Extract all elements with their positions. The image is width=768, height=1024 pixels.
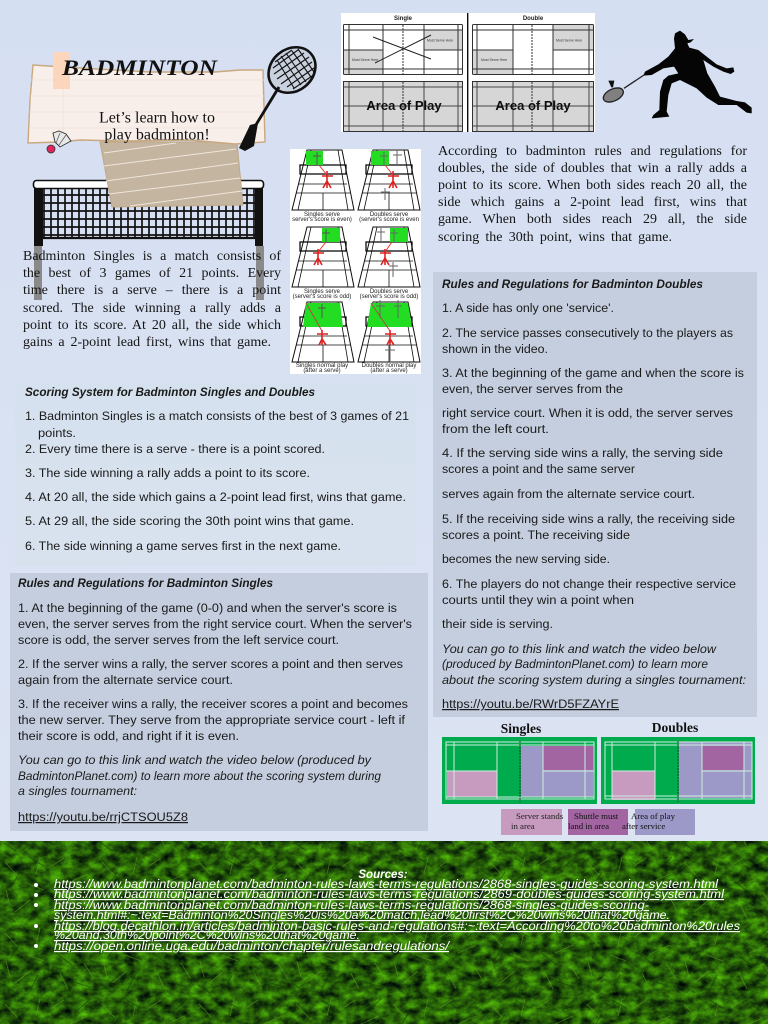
source links: %20and,30th%20point%2C%20wins%20that%20game. bbox=[54, 930, 360, 942]
icon: shuttlecock bbox=[47, 131, 71, 153]
singles list: again from the alternate service court. bbox=[18, 673, 233, 687]
doubles court bbox=[601, 737, 755, 804]
source links: https://www.badmintonplanet.com/badminton-rules-laws-terms-regulations/2868-singles-guides-scoring- bbox=[54, 900, 649, 912]
doubles list: right service court. When it is odd, the server serves bbox=[442, 406, 733, 420]
text: singles intro paragraph bbox=[23, 249, 282, 350]
singles list: their score is odd, and right if it is even. bbox=[18, 729, 239, 743]
singles video note: BadmintonPlanet.com) to learn more about the scoring system during bbox=[18, 769, 381, 783]
singles list: 2. If the server wins a rally, the server scores a point and then serves bbox=[18, 657, 403, 671]
doubles link: https://youtu.be/RWrD5FZAYrE bbox=[442, 697, 619, 711]
singles list bbox=[18, 601, 412, 743]
double serve court: Must Serve Here bbox=[556, 38, 582, 42]
court: singles serve even: Singles serve bbox=[304, 212, 341, 218]
singles heading: Rules and Regulations for Badminton Singles bbox=[18, 576, 273, 590]
singles video note bbox=[18, 753, 381, 798]
doubles list: becomes the new serving side. bbox=[442, 552, 610, 566]
single area of play: Area of Play bbox=[366, 98, 442, 113]
source links bbox=[54, 879, 740, 953]
text: singles intro paragraph: gains a 2-point lead first, wins that game. bbox=[23, 335, 271, 350]
scoring list: 1. Badminton Singles is a match consists of the best of 3 games of 21 bbox=[25, 409, 409, 423]
service court diagrams bbox=[442, 720, 755, 835]
court: doubles normal play bbox=[358, 300, 420, 374]
title note paper bbox=[28, 52, 265, 144]
court: doubles serve even: Doubles serve bbox=[370, 212, 409, 218]
doubles list: even, the server serves from the bbox=[442, 382, 623, 396]
heading: BADMINTON bbox=[61, 55, 218, 80]
panel: singles rules bbox=[10, 573, 428, 831]
doubles list: 6. The players do not change their respective service bbox=[442, 577, 736, 591]
bullets bbox=[34, 883, 38, 948]
doubles list: 4. If the serving side wins a rally, the serving side bbox=[442, 446, 723, 460]
doubles list: shown in the video. bbox=[442, 342, 548, 356]
doubles list: scores a point. The receiving side bbox=[442, 528, 630, 542]
panel: doubles rules bbox=[433, 272, 757, 717]
doubles list: 1. A side has only one 'service'. bbox=[442, 301, 614, 315]
doubles video note bbox=[442, 642, 746, 687]
scoring list: points. bbox=[38, 426, 76, 440]
scoring heading: Scoring System for Badminton Singles and Doubles bbox=[25, 385, 315, 399]
source links: https://www.badmintonplanet.com/badminton-rules-laws-terms-regulations/2869-doubles-guides-scoring-system.html bbox=[54, 889, 724, 901]
court: singles serve odd: Singles serve bbox=[304, 289, 341, 295]
legend: area of play after service: after service bbox=[622, 821, 665, 831]
panel: scoring system bbox=[15, 383, 416, 566]
court: doubles normal play: (after a serve) bbox=[370, 368, 408, 374]
text: doubles intro paragraph: According to badminton rules and regulations for bbox=[438, 144, 747, 159]
double serve court bbox=[472, 24, 594, 74]
doubles list: courts until they win a point when bbox=[442, 593, 634, 607]
sources bbox=[34, 869, 740, 953]
text: singles intro paragraph: the best of 3 games of 21 points. Every bbox=[23, 266, 281, 281]
court: singles serve even: server's score is even) bbox=[292, 217, 352, 223]
text: singles intro paragraph: scored. The side winning a rally adds a bbox=[23, 301, 281, 316]
doubles list: 3. At the beginning of the game and when the score is bbox=[442, 366, 744, 380]
court: doubles serve even bbox=[358, 150, 420, 223]
court area diagram: single and double bbox=[341, 13, 595, 132]
double area of play bbox=[472, 82, 594, 132]
scoring list: 2. Every time there is a serve - there is a point scored. bbox=[25, 442, 325, 456]
net illustration bbox=[34, 180, 264, 300]
source links: https://www.badmintonplanet.com/badminton-rules-laws-terms-regulations/2868-singles-guides-scoring-system.html bbox=[54, 879, 718, 891]
tape bbox=[53, 52, 70, 89]
doubles list bbox=[442, 301, 744, 631]
text: doubles intro paragraph: doubles, the side of doubles that win a rally adds a bbox=[438, 161, 747, 176]
court: singles normal play: Singles normal play bbox=[296, 363, 348, 369]
icon: racket bbox=[239, 38, 325, 151]
court: doubles serve even: (server's score is even bbox=[359, 217, 419, 223]
court: singles serve odd: (server's score is odd) bbox=[293, 294, 351, 300]
doubles list: 5. If the receiving side wins a rally, the receiving side bbox=[442, 512, 735, 526]
doubles list: 2. The service passes consecutively to the players as bbox=[442, 326, 733, 340]
source links: system.html#:~:text=Badminton%20Singles%20is%20a%20match,lead%20first%2C%20wins%20that%20game. bbox=[54, 910, 670, 922]
scoring list: 6. The side winning a game serves first in the next game. bbox=[25, 539, 341, 553]
singles list: 1. At the beginning of the game (0-0) and when the server's score is bbox=[18, 601, 397, 615]
singles label: Singles bbox=[501, 721, 541, 736]
source links: https://blog.decathlon.in/articles/badminton-basic-rules-and-regulations#:~:text=According%20to%20badminton%20rules bbox=[54, 921, 740, 933]
court: singles serve even bbox=[292, 150, 354, 223]
double area of play: Area of Play bbox=[495, 98, 571, 113]
court: singles serve odd bbox=[292, 227, 354, 300]
singles list: 3. If the receiver wins a rally, the receiver scores a point and becomes bbox=[18, 697, 408, 711]
icon: player silhouette bbox=[601, 31, 752, 118]
doubles video note: You can go to this link and watch the video below bbox=[442, 642, 717, 656]
doubles list: scores a point and the same server bbox=[442, 462, 635, 476]
subtitle: Let’s learn how to bbox=[99, 110, 215, 126]
text: doubles intro paragraph: game. When both sides reach 29 all, the side bbox=[438, 212, 747, 227]
doubles list: serves again from the alternate service court. bbox=[442, 487, 695, 501]
singles list: even, the server serves from the right service court. When the server's bbox=[18, 617, 412, 631]
text: doubles intro paragraph: point to its score. When both sides reach 20 all, the bbox=[438, 178, 747, 193]
court: singles normal play bbox=[292, 302, 354, 374]
scoring list bbox=[25, 409, 409, 553]
doubles list: from the left court. bbox=[442, 422, 549, 436]
doubles video note: about the scoring system during a singles tournament: bbox=[442, 673, 746, 687]
doubles heading: Rules and Regulations for Badminton Doubles bbox=[442, 277, 703, 291]
singles video note: You can go to this link and watch the video below (produced by bbox=[18, 753, 372, 767]
legend: shuttle must land in area: land in area bbox=[568, 821, 609, 831]
singles court bbox=[442, 737, 597, 804]
legend: area of play after service bbox=[622, 809, 695, 835]
sources heading: Sources: bbox=[358, 869, 408, 881]
text: singles intro paragraph: Badminton Singles is a match consists of bbox=[23, 249, 281, 264]
legend: server stands in area bbox=[501, 809, 564, 835]
singles list: score is odd, the server serves from the left service court. bbox=[18, 633, 339, 647]
double heading: Double bbox=[523, 16, 544, 22]
legend: area of play after service: Area of play bbox=[631, 811, 676, 821]
court: doubles serve odd: Doubles serve bbox=[370, 289, 409, 295]
text: doubles intro paragraph: scoring the 30th point, wins that game. bbox=[438, 230, 672, 245]
subtitle: play badminton! bbox=[104, 126, 210, 144]
text: singles intro paragraph: point to its score. At 20 all, the side which bbox=[23, 318, 281, 333]
scoring list: 4. At 20 all, the side which gains a 2-point lead first, wins that game. bbox=[25, 490, 406, 504]
court: singles normal play: (after a serve) bbox=[303, 368, 341, 374]
doubles label: Doubles bbox=[652, 720, 698, 735]
legend: shuttle must land in area bbox=[568, 809, 628, 835]
text: singles intro paragraph: time there is a serve – there is a point bbox=[23, 283, 281, 298]
court: doubles serve odd bbox=[358, 227, 420, 300]
scoring list: 5. At 29 all, the side scoring the 30th point wins that game. bbox=[25, 514, 354, 528]
serve diagrams bbox=[290, 149, 421, 374]
single heading: Single bbox=[394, 16, 413, 22]
singles video note: a singles tournament: bbox=[18, 784, 137, 798]
single serve court: Must Serve Here bbox=[427, 38, 453, 42]
double serve court: Must Serve Here bbox=[481, 58, 507, 62]
source links: https://open.online.uga.edu/badminton/chapter/rulesandregulations/ bbox=[54, 941, 451, 953]
text: doubles intro paragraph bbox=[438, 144, 747, 245]
grass footer background bbox=[0, 841, 768, 1024]
court: doubles normal play: Doubles normal play bbox=[362, 363, 416, 369]
doubles video note: (produced by BadmintonPlanet.com) to learn more bbox=[442, 657, 708, 671]
text: doubles intro paragraph: side which gains a 2-point lead first, wins that bbox=[438, 195, 747, 210]
single serve court bbox=[344, 24, 463, 74]
legend: shuttle must land in area: Shuttle must bbox=[574, 811, 619, 821]
doubles list: their side is serving. bbox=[442, 617, 553, 631]
legend: server stands in area: in area bbox=[511, 821, 535, 831]
singles link: https://youtu.be/rrjCTSOU5Z8 bbox=[18, 810, 188, 824]
single serve court: Must Serve Here bbox=[352, 58, 378, 62]
scoring list: 3. The side winning a rally adds a point to its score. bbox=[25, 466, 310, 480]
single area of play bbox=[344, 82, 462, 132]
singles list: the new server. They serve from the appropriate service court - left if bbox=[18, 713, 406, 727]
legend: server stands in area: Server stands bbox=[516, 811, 564, 821]
court: doubles serve odd: (server's score is odd) bbox=[360, 294, 418, 300]
torn tan paper bbox=[100, 142, 243, 207]
